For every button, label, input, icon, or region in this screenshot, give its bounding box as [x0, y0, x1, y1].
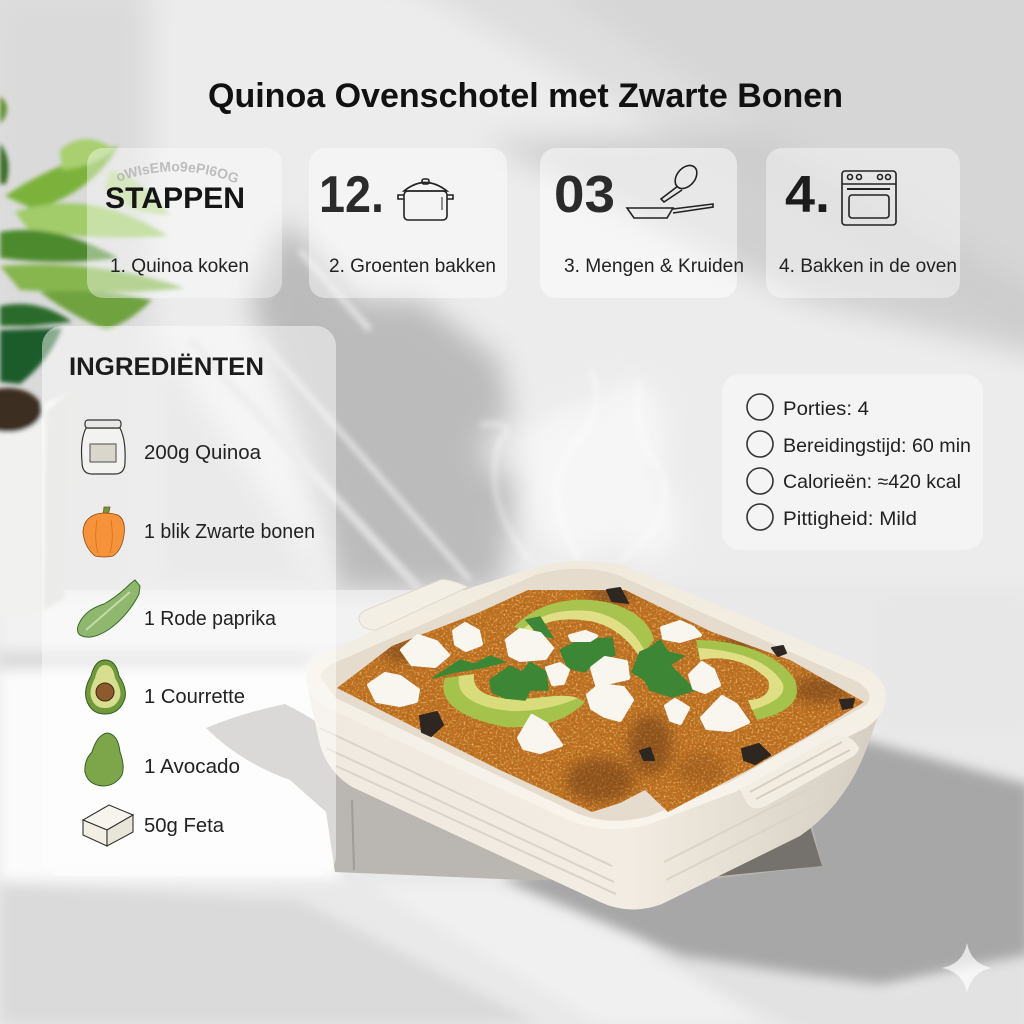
icon: courgette — [78, 580, 140, 637]
ingredient: quinoa: 200g Quinoa — [144, 442, 262, 464]
step label 2: 2. Groenten bakken — [329, 256, 496, 277]
steam — [480, 370, 680, 560]
icon: sparkle watermark — [942, 943, 992, 993]
plant leaves — [0, 96, 185, 384]
info: calories: Calorieën: ≈420 kcal — [783, 471, 961, 493]
handle left — [359, 580, 468, 630]
title: Quinoa Ovenschotel met Zwarte Bonen — [208, 77, 843, 115]
info: portions: Porties: 4 — [783, 398, 869, 420]
avocado slices — [443, 600, 797, 727]
panel: step 1 — [87, 148, 282, 298]
icon: pot — [398, 179, 453, 220]
step number 03: 03 — [554, 166, 615, 224]
step number 4: 4. — [785, 166, 830, 224]
ingredient: black beans: 1 blik Zwarte bonen — [144, 521, 315, 543]
ingredient: red pepper: 1 Rode paprika — [144, 608, 277, 630]
feta crumbles — [369, 622, 748, 752]
heading: ingredienten: INGREDIËNTEN — [69, 353, 264, 381]
step number 12: 12. — [319, 166, 384, 224]
burnt and shaded areas — [382, 585, 848, 802]
panel: step 4 — [766, 148, 960, 298]
icon: quinoa jar — [82, 420, 125, 474]
ingredient: feta: 50g Feta — [144, 815, 225, 837]
handle right — [740, 736, 859, 808]
towel under dish — [206, 704, 822, 880]
dish rim — [306, 561, 886, 829]
parsley — [433, 617, 695, 700]
info: portions — [747, 394, 869, 420]
ingredient: avocado: 1 Avocado — [144, 756, 240, 778]
plant pot with soil — [0, 388, 70, 616]
garbled arc text: oWIsEMo9ePI6OG — [117, 162, 238, 182]
info: spiciness: Pittigheid: Mild — [783, 508, 917, 530]
icon: feta block — [83, 805, 133, 846]
icon: oven — [842, 171, 896, 225]
step label 1: 1. Quinoa koken — [110, 256, 249, 277]
icon: whole avocado — [85, 733, 123, 786]
info: spiciness — [747, 504, 917, 530]
icon: avocado half — [86, 660, 125, 714]
dish inner wall — [321, 568, 870, 821]
panel: step 3 — [540, 148, 744, 298]
dish body — [308, 690, 884, 910]
black beans — [420, 588, 854, 764]
panel: recipe info — [722, 374, 983, 550]
quinoa bake — [337, 590, 864, 812]
panel: step 2 — [309, 148, 507, 298]
ingredient: courgette: 1 Courrette — [144, 686, 245, 708]
heading: stappen: STAPPEN — [105, 182, 245, 215]
step label 3: 3. Mengen & Kruiden — [564, 256, 744, 277]
icon: orange pepper — [83, 507, 124, 557]
icon: pan and spoon — [627, 161, 713, 218]
info: preparation time: Bereidingstijd: 60 min — [783, 435, 971, 457]
baking dish with quinoa — [306, 561, 886, 910]
step label 4: 4. Bakken in de oven — [779, 256, 957, 277]
panel: ingredients — [42, 326, 336, 876]
